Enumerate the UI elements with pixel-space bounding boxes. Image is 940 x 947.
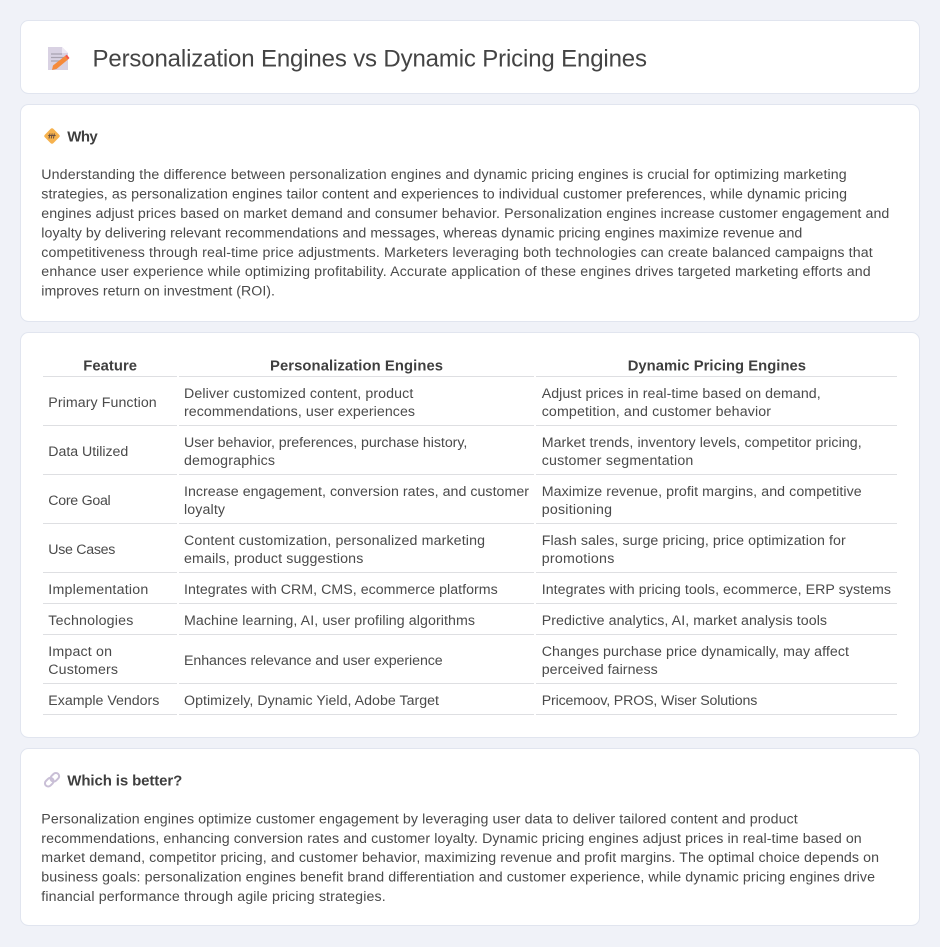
- row: data utilized: demographics: [184, 453, 275, 469]
- panel: comparison table: [20, 332, 920, 738]
- row: core goal: [43, 484, 897, 524]
- row: impact on customers: Changes purchase price dynamically, may affect: [542, 644, 849, 660]
- row: example vendors: Optimizely, Dynamic Yield, Adobe Target: [184, 693, 439, 709]
- text block: why paragraph: strategies, as personalization engines tailor content and experiences to individual customer preferences, while dynamic pricing: [41, 186, 847, 202]
- row: use cases: Use Cases: [48, 542, 115, 558]
- row: data utilized: Market trends, inventory levels, competitor pricing,: [542, 435, 862, 451]
- panel: which is better: [20, 748, 920, 926]
- row: use cases: [43, 533, 897, 573]
- row: use cases: Flash sales, surge pricing, price optimization for: [542, 533, 846, 549]
- row: primary function: recommendations, user experiences: [184, 404, 415, 420]
- row: primary function: Adjust prices in real-time based on demand,: [542, 386, 821, 402]
- row: impact on customers: Enhances relevance and user experience: [184, 653, 443, 669]
- row: impact on customers: perceived fairness: [542, 662, 658, 678]
- row: technologies: Machine learning, AI, user profiling algorithms: [184, 613, 475, 629]
- row: data utilized: [43, 435, 897, 475]
- row: impact on customers: [43, 644, 897, 684]
- table header: Personalization Engines: [270, 359, 443, 375]
- row: impact on customers: Customers: [48, 662, 118, 678]
- row: technologies: Predictive analytics, AI, market analysis tools: [542, 613, 827, 629]
- row: example vendors: [43, 693, 897, 715]
- row: use cases: emails, product suggestions: [184, 551, 363, 567]
- row: data utilized: User behavior, preferences, purchase history,: [184, 435, 467, 451]
- text block: which is better paragraph: market demand, competitor pricing, and customer behavior, maximizing revenue and profit margins. The optimal choice depends on: [41, 850, 879, 866]
- text block: which is better paragraph: financial performance through agile pricing strategies.: [41, 889, 386, 905]
- row: core goal: loyalty: [184, 502, 226, 518]
- row: example vendors: Pricemoov, PROS, Wiser Solutions: [542, 693, 757, 709]
- heading: why: Why: [67, 129, 98, 146]
- row: primary function: Primary Function: [48, 395, 157, 411]
- text block: why paragraph: Understanding the difference between personalization engines and dynamic pricing engines is crucial for optimizing marketing: [41, 167, 847, 183]
- row: technologies: [43, 613, 897, 635]
- text block: which is better paragraph: [41, 811, 879, 905]
- row: primary function: Deliver customized content, product: [184, 386, 413, 402]
- heading: which is better: Which is better?: [67, 773, 182, 790]
- row: example vendors: Example Vendors: [48, 693, 159, 709]
- title: Personalization Engines vs Dynamic Pricing Engines: [92, 46, 647, 72]
- row: primary function: [43, 386, 897, 426]
- row: technologies: Technologies: [48, 613, 133, 629]
- row: core goal: Core Goal: [48, 493, 111, 509]
- icon: document with pencil: [48, 47, 70, 70]
- text block: why paragraph: competitiveness through real-time price adjustments. Marketers leveraging both technologies can create balanced campaigns that: [41, 245, 873, 261]
- row: core goal: Maximize revenue, profit margins, and competitive: [542, 484, 862, 500]
- text block: which is better paragraph: Personalization engines optimize customer engagement by leveraging user data to deliver tailored content and product: [41, 811, 798, 827]
- row: implementation: [43, 582, 897, 604]
- text block: why paragraph: [41, 167, 889, 300]
- row: core goal: positioning: [542, 502, 612, 518]
- text block: which is better paragraph: business goals: personalization engines benefit brand differentiation and customer experience, while dynamic pricing engines drive: [41, 870, 875, 886]
- row: implementation: Implementation: [48, 582, 148, 598]
- table header: Dynamic Pricing Engines: [628, 359, 806, 375]
- row: data utilized: Data Utilized: [48, 444, 128, 460]
- row: use cases: promotions: [542, 551, 614, 567]
- icon: diamond sign: [44, 128, 60, 144]
- row: data utilized: customer segmentation: [542, 453, 693, 469]
- text block: why paragraph: loyalty by delivering relevant recommendations and messages, whereas dynamic pricing engines maximize revenue and: [41, 225, 802, 241]
- row: implementation: Integrates with CRM, CMS, ecommerce platforms: [184, 582, 498, 598]
- icon: chain link: [44, 772, 60, 788]
- table header: Feature: [83, 359, 137, 375]
- row: primary function: competition, and customer behavior: [542, 404, 771, 420]
- panel: title card: [20, 20, 920, 94]
- row: implementation: Integrates with pricing tools, ecommerce, ERP systems: [542, 582, 891, 598]
- text block: why paragraph: enhance user experience while optimizing profitability. Accurate application of these engines drives targeted marketing efforts and: [41, 264, 871, 280]
- row: use cases: Content customization, personalized marketing: [184, 533, 485, 549]
- row: impact on customers: Impact on: [48, 644, 112, 660]
- row: core goal: Increase engagement, conversion rates, and customer: [184, 484, 529, 500]
- panel: why: [20, 104, 920, 322]
- text block: why paragraph: engines adjust prices based on market demand and consumer behavior. Personalization engines increase customer engagement and: [41, 206, 889, 222]
- table header: [43, 359, 897, 377]
- text block: which is better paragraph: recommendations, enhancing conversion rates and customer loyalty. Dynamic pricing engines adjust prices in real-time based on: [41, 831, 862, 847]
- text block: why paragraph: improves return on investment (ROI).: [41, 284, 275, 300]
